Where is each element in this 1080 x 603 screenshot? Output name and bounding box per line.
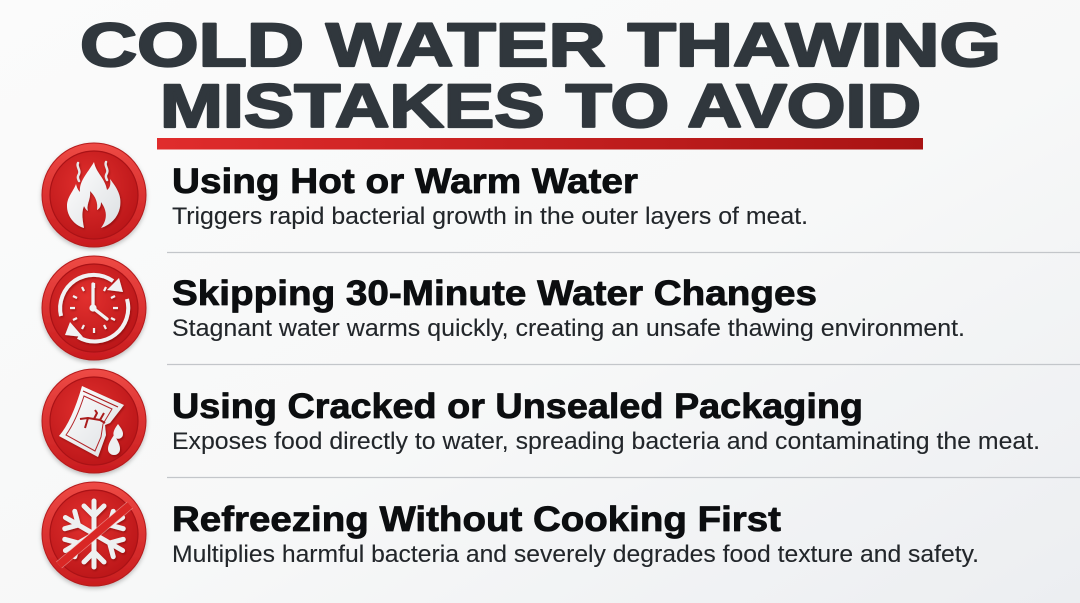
title: MISTAKES TO AVOID [160,72,921,140]
icon: crossed-out snowflake [42,482,146,586]
panel: cracked packaging [42,369,1040,473]
panel: skipping water changes [42,256,965,360]
description: Exposes food directly to water, spreading bacteria and contaminating the meat. [172,428,1040,455]
row dividers [167,252,1080,478]
heading: Refreezing Without Cooking First [172,500,781,539]
description: Triggers rapid bacterial growth in the outer layers of meat. [172,203,808,230]
description: Multiplies harmful bacteria and severely degrades food texture and safety. [172,541,979,568]
panel: using hot or warm water [42,143,808,247]
heading: Using Hot or Warm Water [172,162,638,201]
title underline [157,138,923,150]
icon: torn bag with drips [42,369,146,473]
description: Stagnant water warms quickly, creating an unsafe thawing environment. [172,315,965,342]
panel: refreezing [42,482,979,586]
icon: clock with cycle arrows [42,256,146,360]
heading: Skipping 30-Minute Water Changes [172,274,817,313]
title [80,11,1001,140]
title: COLD WATER THAWING [80,11,1001,79]
heading: Using Cracked or Unsealed Packaging [172,387,863,426]
icon: flame [42,143,146,247]
